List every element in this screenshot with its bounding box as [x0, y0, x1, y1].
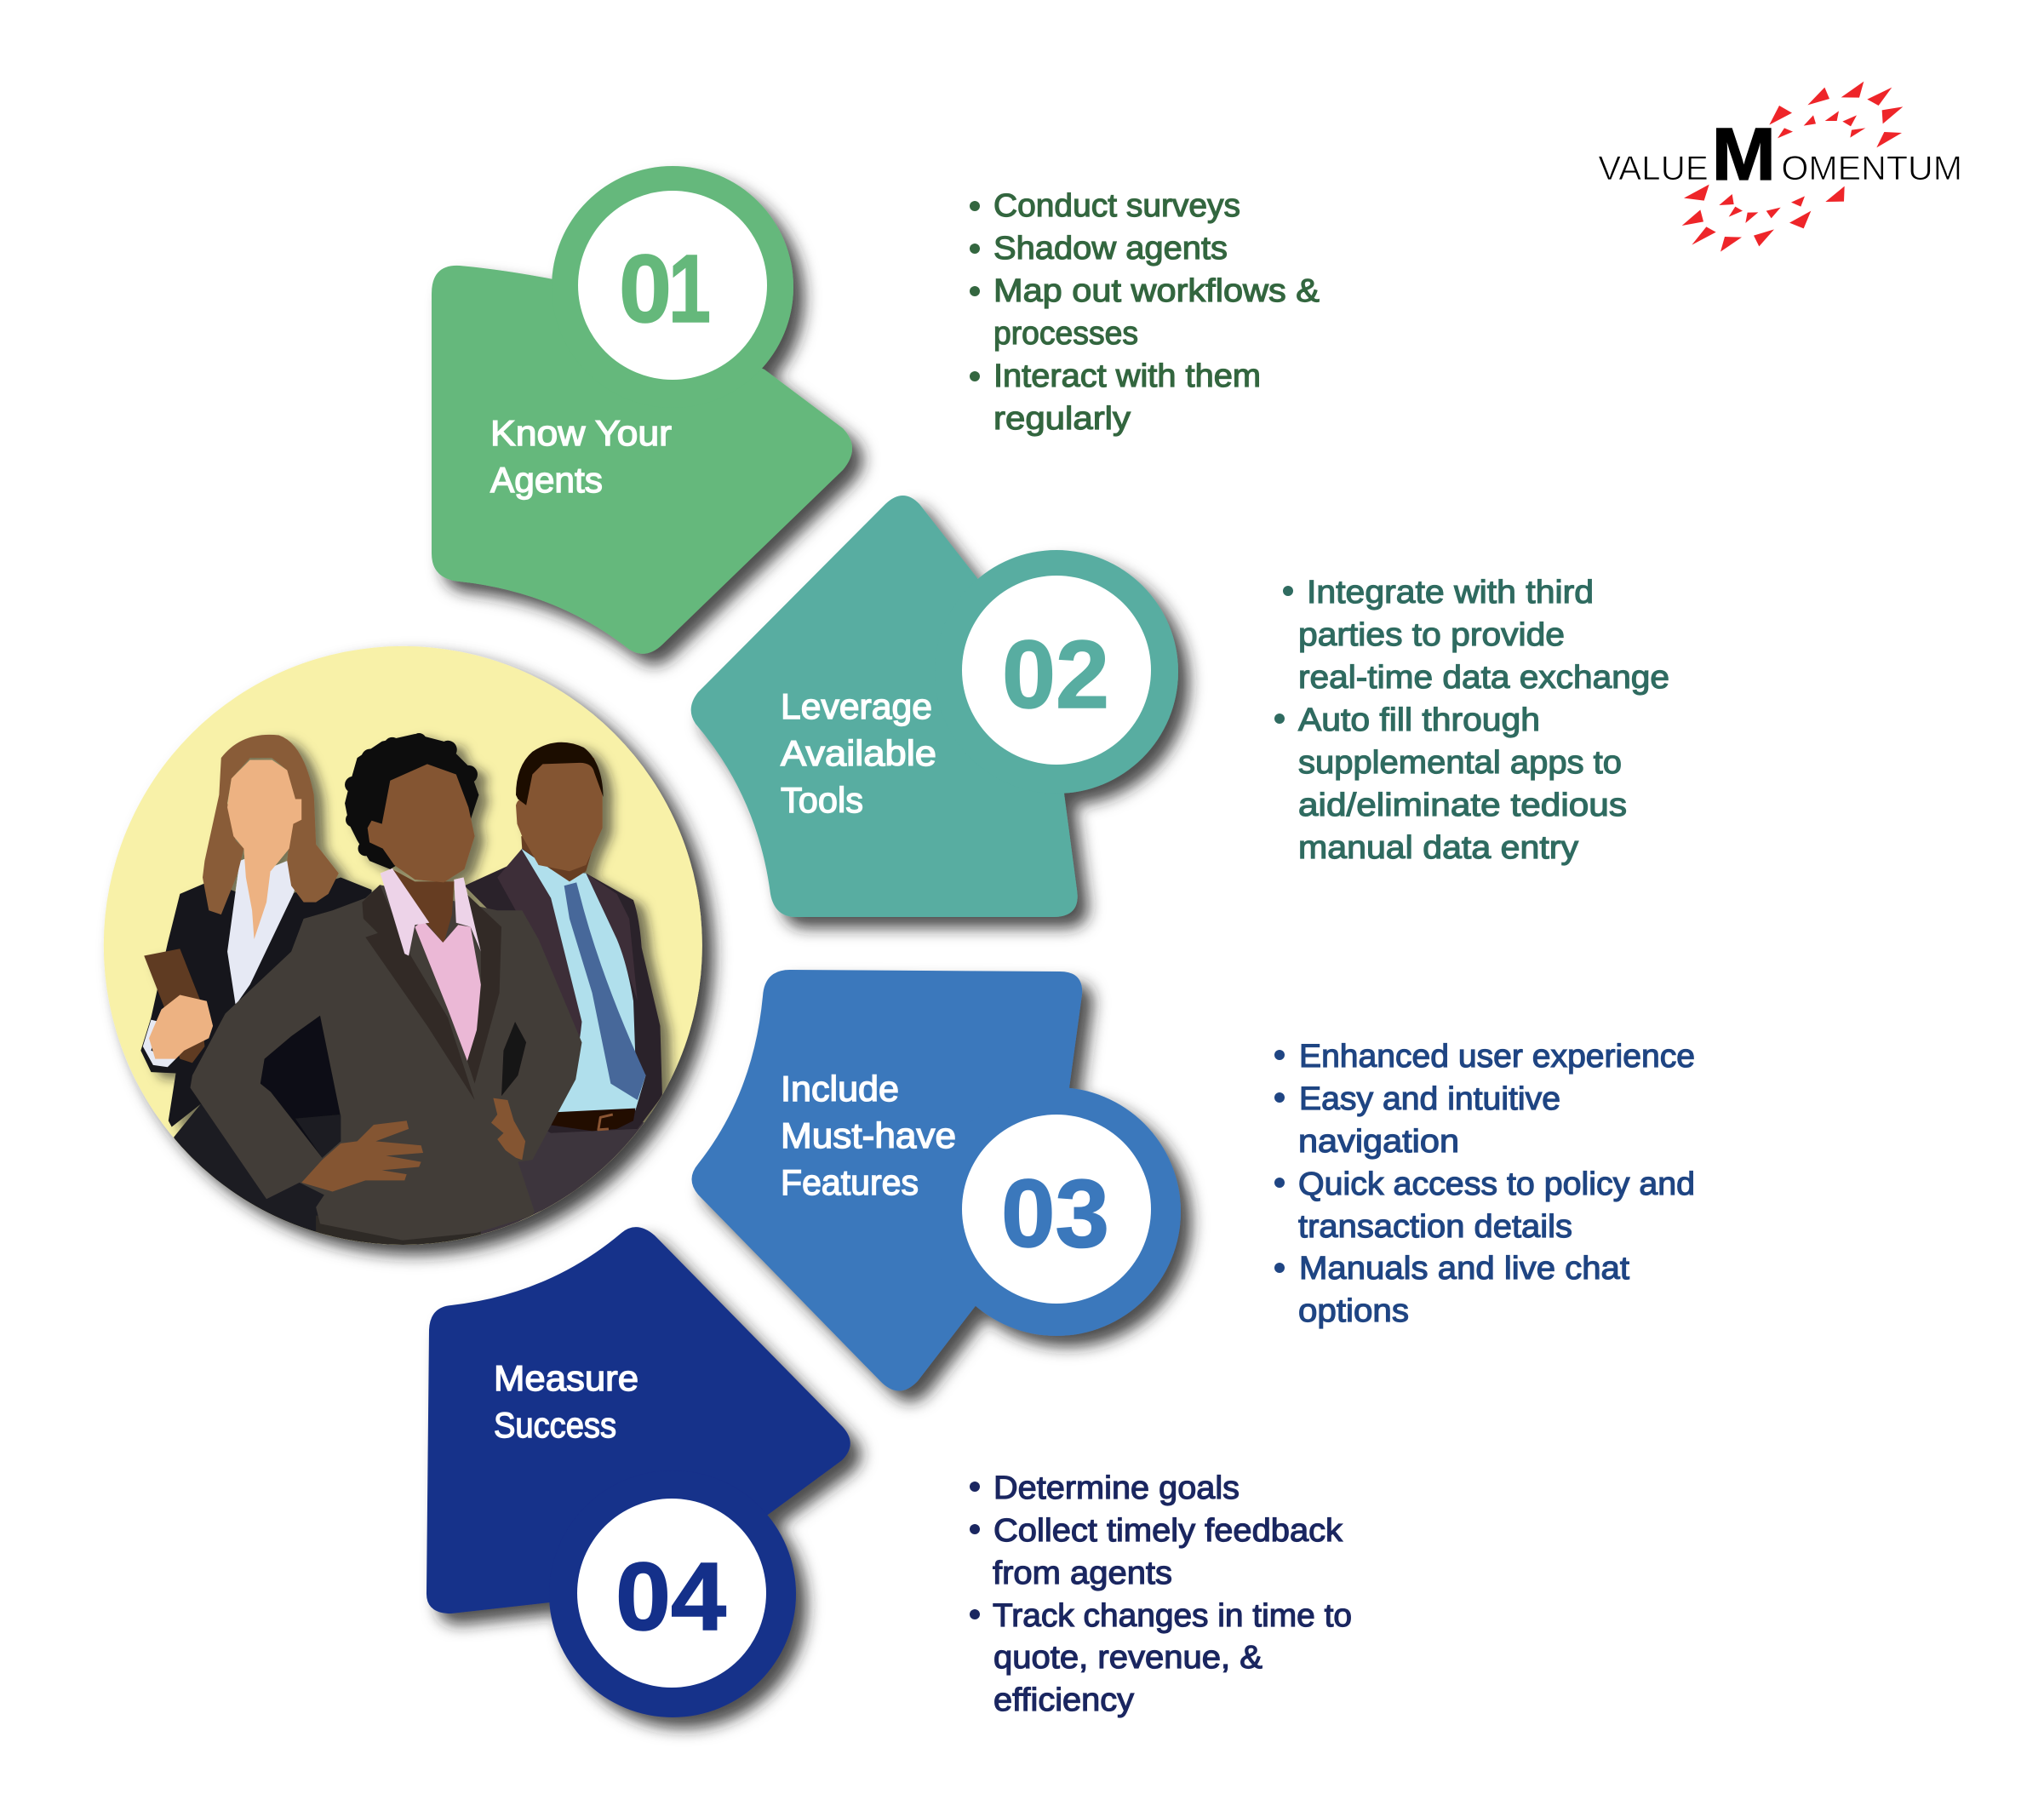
- text block: step 01 bullets: [970, 188, 1320, 437]
- text block: step 04 bullets: from agents: [993, 1556, 1172, 1591]
- number badge 03: [962, 1115, 1151, 1304]
- green arrow shape with number ring: [432, 166, 852, 654]
- navy arrow shape with number ring: [427, 1227, 850, 1717]
- heading: Include Must-have Features: Must-have: [781, 1115, 956, 1155]
- number badge 04: 04: [615, 1543, 726, 1650]
- yellow circle background: [104, 646, 702, 1245]
- text block: step 03 bullets: Easy and intuitive: [1299, 1081, 1560, 1117]
- text block: step 04 bullets: [970, 1470, 1352, 1718]
- logo wordmark: VALUE: [1598, 150, 1709, 187]
- logo red swirl triangles: [1682, 82, 1903, 252]
- text block: step 04 bullets: Collect timely feedback: [993, 1513, 1343, 1549]
- number badge 03: 03: [1001, 1160, 1109, 1267]
- heading: Know Your Agents: Know Your: [490, 413, 672, 453]
- text block: step 03 bullets: options: [1298, 1293, 1409, 1329]
- text block: step 01 bullets: regularly: [993, 401, 1131, 437]
- text block: step 03 bullets: Enhanced user experience: [1299, 1039, 1695, 1075]
- number badge 02: 02: [1002, 621, 1109, 728]
- heading: Include Must-have Features: [781, 1069, 956, 1202]
- man on the right: [464, 742, 671, 1257]
- text block: step 03 bullets: navigation: [1298, 1124, 1459, 1160]
- heading: Leverage Available Tools: Available: [781, 733, 936, 773]
- text block: step 03 bullets: [1274, 1039, 1695, 1329]
- text block: step 02 bullets: parties to provide: [1298, 617, 1565, 653]
- number badge 04: [577, 1499, 766, 1688]
- number badge 01: [578, 191, 767, 380]
- text block: step 04 bullets: Determine goals: [993, 1470, 1240, 1506]
- text block: step 01 bullets: Interact with them: [993, 358, 1261, 394]
- heading: Include Must-have Features: Features: [781, 1162, 919, 1202]
- text block: step 02 bullets: [1274, 575, 1669, 866]
- text block: step 03 bullets: Quick access to policy and: [1298, 1166, 1695, 1202]
- text block: step 01 bullets: Conduct surveys: [993, 188, 1240, 224]
- text block: step 02 bullets: manual data entry: [1298, 830, 1578, 866]
- number badge 01: 1: [668, 235, 711, 342]
- panel: step 03 Include Must-have Features: [691, 970, 1181, 1391]
- logo: ValueMomentum: [1598, 82, 1962, 252]
- number badge 02: [962, 576, 1151, 765]
- heading: Leverage Available Tools: [781, 686, 936, 820]
- heading: Leverage Available Tools: Leverage: [781, 686, 932, 726]
- text block: step 04 bullets: quote, revenue, &: [993, 1640, 1262, 1676]
- text block: step 04 bullets: Track changes in time to: [993, 1598, 1352, 1634]
- logo wordmark: OMENTUM: [1781, 150, 1962, 187]
- text block: step 02 bullets: supplemental apps to: [1298, 745, 1622, 781]
- heading: Know Your Agents: Agents: [490, 460, 603, 500]
- heading: Measure Success: Measure: [494, 1358, 638, 1398]
- text block: step 01 bullets: processes: [993, 316, 1138, 352]
- number badge 01: 0: [619, 235, 672, 342]
- text block: step 01 bullets: Map out workflows &: [993, 273, 1320, 309]
- panel: step 01 Know Your Agents: [432, 166, 852, 654]
- woman on the left: [140, 735, 374, 1248]
- heading: Measure Success: Success: [494, 1405, 616, 1445]
- blue arrow shape with number ring: [691, 970, 1181, 1391]
- heading: Include Must-have Features: Include: [781, 1069, 899, 1109]
- heading: Leverage Available Tools: Tools: [781, 780, 863, 820]
- text block: step 02 bullets: Auto fill through: [1298, 702, 1540, 738]
- logo wordmark: M: [1712, 112, 1776, 196]
- heading: Know Your Agents: [490, 413, 672, 500]
- logo wordmark: [1598, 112, 1962, 196]
- panel: step 04 Measure Success: [427, 1227, 850, 1717]
- woman in the centre: [190, 733, 581, 1257]
- heading: Measure Success: [494, 1358, 638, 1445]
- illustration: three business people in yellow circle: [104, 646, 702, 1257]
- text block: step 03 bullets: Manuals and live chat: [1299, 1251, 1629, 1287]
- text block: step 02 bullets: real-time data exchange: [1298, 660, 1669, 696]
- text block: step 04 bullets: efficiency: [993, 1682, 1134, 1718]
- text block: step 01 bullets: Shadow agents: [993, 231, 1228, 267]
- text block: step 02 bullets: Integrate with third: [1307, 575, 1594, 610]
- teal arrow shape with number ring: [691, 496, 1178, 917]
- panel: step 02 Leverage Available Tools: [691, 496, 1178, 917]
- people group: [140, 733, 671, 1257]
- text block: step 02 bullets: aid/eliminate tedious: [1298, 788, 1627, 823]
- text block: step 03 bullets: transaction details: [1298, 1209, 1572, 1245]
